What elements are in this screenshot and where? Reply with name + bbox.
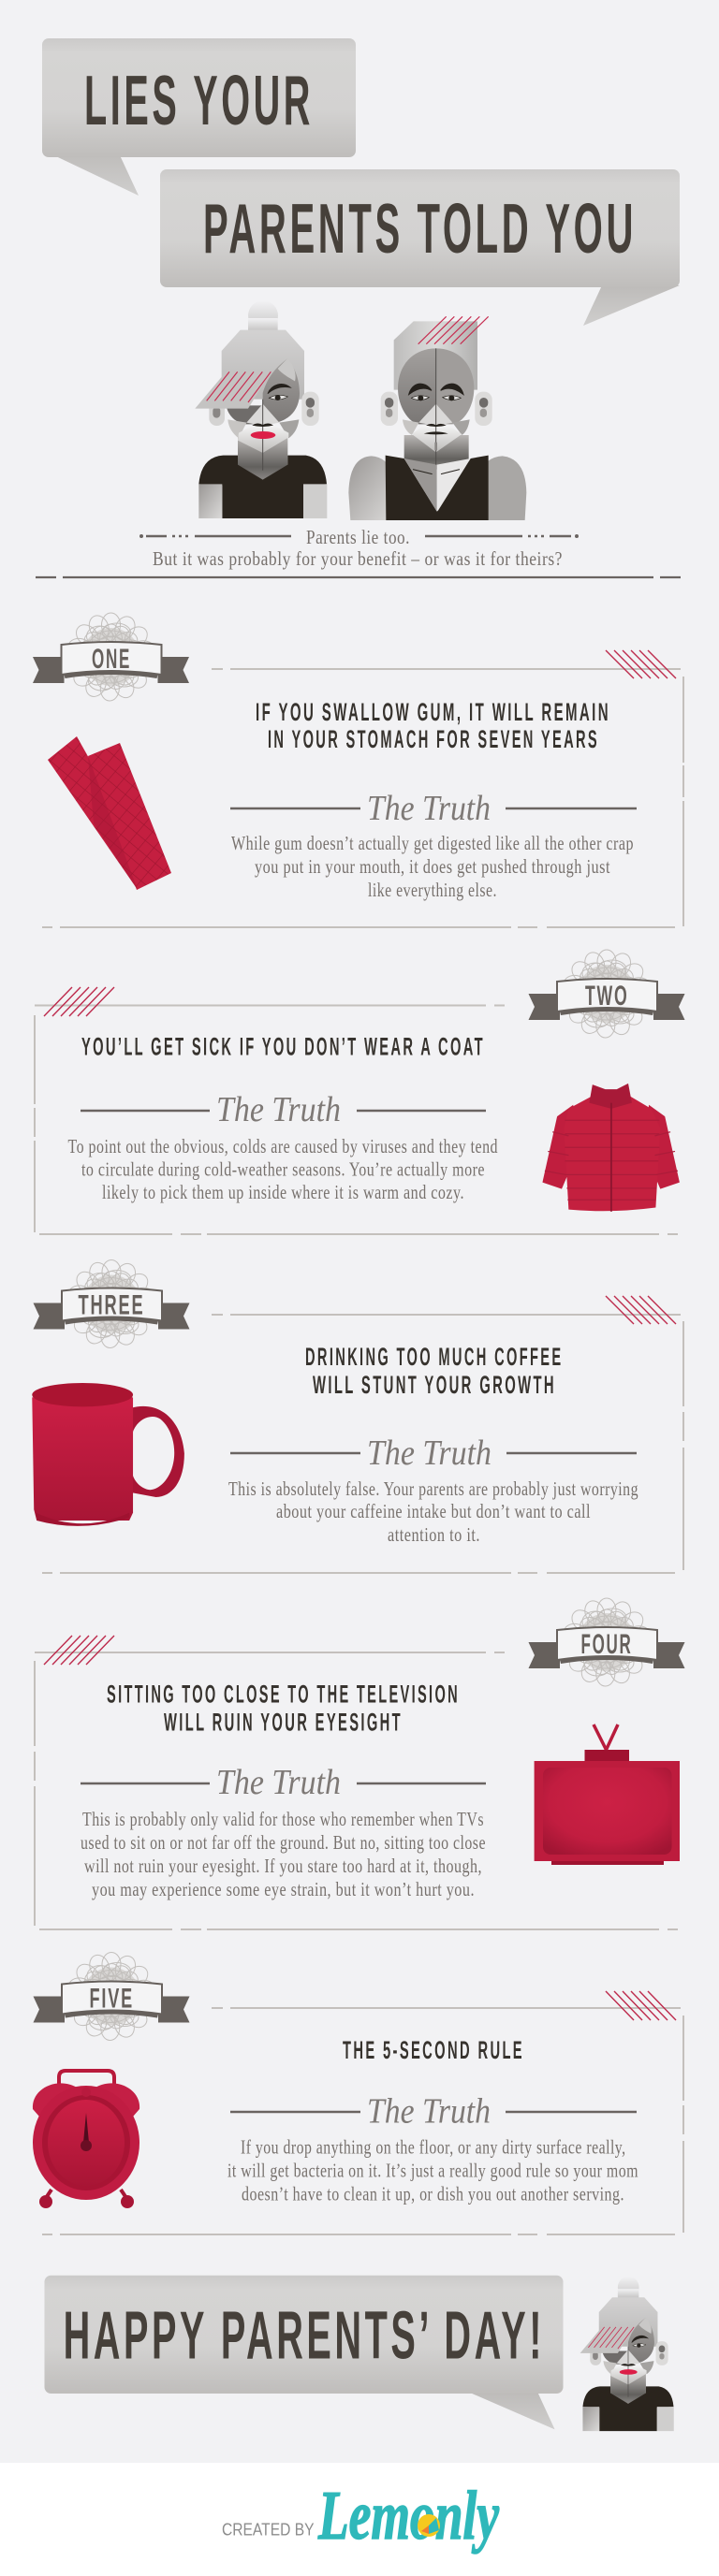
heading four: WILL RUIN YOUR EYESIGHT (164, 1708, 403, 1736)
closing speech bubble (45, 2276, 564, 2429)
intro text (153, 526, 563, 570)
footer (0, 2463, 719, 2576)
truth text one (231, 832, 634, 901)
truth text four: you may experience some eye strain, but it won’t hurt you. (92, 1878, 475, 1900)
badge three: THREE (79, 1289, 144, 1321)
section one panel (33, 613, 683, 927)
heading five: THE 5-SECOND RULE (343, 2036, 524, 2064)
illustration: father (348, 316, 526, 520)
badge four: FOUR (580, 1629, 632, 1660)
intro divider (36, 534, 681, 577)
truth text three (228, 1477, 638, 1546)
hatch accent (606, 650, 676, 678)
truth text two: To point out the obvious, colds are caused by viruses and they tend (67, 1135, 498, 1157)
title: speech bubble one (42, 38, 356, 196)
icon: mug (32, 1383, 184, 1526)
section two frame (35, 1005, 678, 1234)
badge three (34, 1259, 189, 1348)
truth text one: you put in your mouth, it does get pushed through just (255, 855, 610, 878)
credit text: CREATED BY (222, 2520, 315, 2539)
badge two: TWO (585, 981, 629, 1011)
intro text: Parents lie too. (306, 526, 410, 548)
heading three (305, 1343, 564, 1399)
icon: television (535, 1725, 680, 1865)
illustration: mother (195, 300, 327, 518)
logo: Lemonly: Lemonly (317, 2478, 500, 2554)
hatch accent (606, 1296, 676, 1324)
truth text four (81, 1808, 486, 1900)
icon: alarm clock (33, 2071, 139, 2208)
hatch accent (606, 1991, 676, 2020)
hatch accent (44, 1636, 114, 1665)
section three panel (32, 1259, 683, 1573)
truth text four: will not ruin your eyesight. If you stare too hard at it, though, (84, 1855, 482, 1877)
section five frame (42, 2008, 683, 2234)
section three frame (42, 1315, 683, 1573)
badge five (34, 1952, 189, 2041)
section four frame (35, 1652, 678, 1929)
truth text four: This is probably only valid for those who remember when TVs (82, 1808, 484, 1830)
badge two (528, 950, 685, 1038)
section two panel (35, 950, 685, 1234)
truth text five (227, 2136, 638, 2205)
section four panel (35, 1598, 685, 1929)
badge one: ONE (92, 644, 131, 675)
truth text one: like everything else. (368, 879, 497, 901)
icon: gum (48, 736, 171, 890)
icon: coat (542, 1084, 680, 1212)
title: speech bubble two (160, 169, 680, 326)
truth text three: attention to it. (388, 1523, 480, 1546)
section five panel (33, 1952, 683, 2234)
hatch accent (44, 987, 114, 1016)
the truth label: The Truth (367, 1434, 492, 1473)
truth text two: likely to pick them up inside where it is warm and cozy. (102, 1181, 464, 1203)
truth text two: to circulate during cold-weather seasons. You’re actually more (81, 1158, 485, 1181)
intro text: But it was probably for your benefit – or was it for theirs? (153, 547, 563, 570)
badge five: FIVE (90, 1984, 134, 2014)
the truth label: The Truth (367, 2092, 491, 2132)
the truth label: The Truth (367, 789, 491, 828)
heading four (107, 1680, 460, 1736)
the truth label: The Truth (216, 1090, 341, 1129)
the truth label: The Truth (216, 1763, 341, 1802)
heading one (256, 698, 610, 753)
illustration: mother small (580, 2277, 674, 2431)
badge four (528, 1598, 685, 1686)
title: speech bubble one: LIES YOUR (84, 61, 314, 139)
section one frame (42, 669, 683, 927)
truth text three: about your caffeine intake but don’t want to call (276, 1500, 591, 1522)
truth text two (67, 1135, 498, 1203)
truth text four: used to sit on or not far off the ground. But no, sitting too close (81, 1831, 486, 1854)
badge one (33, 613, 189, 701)
